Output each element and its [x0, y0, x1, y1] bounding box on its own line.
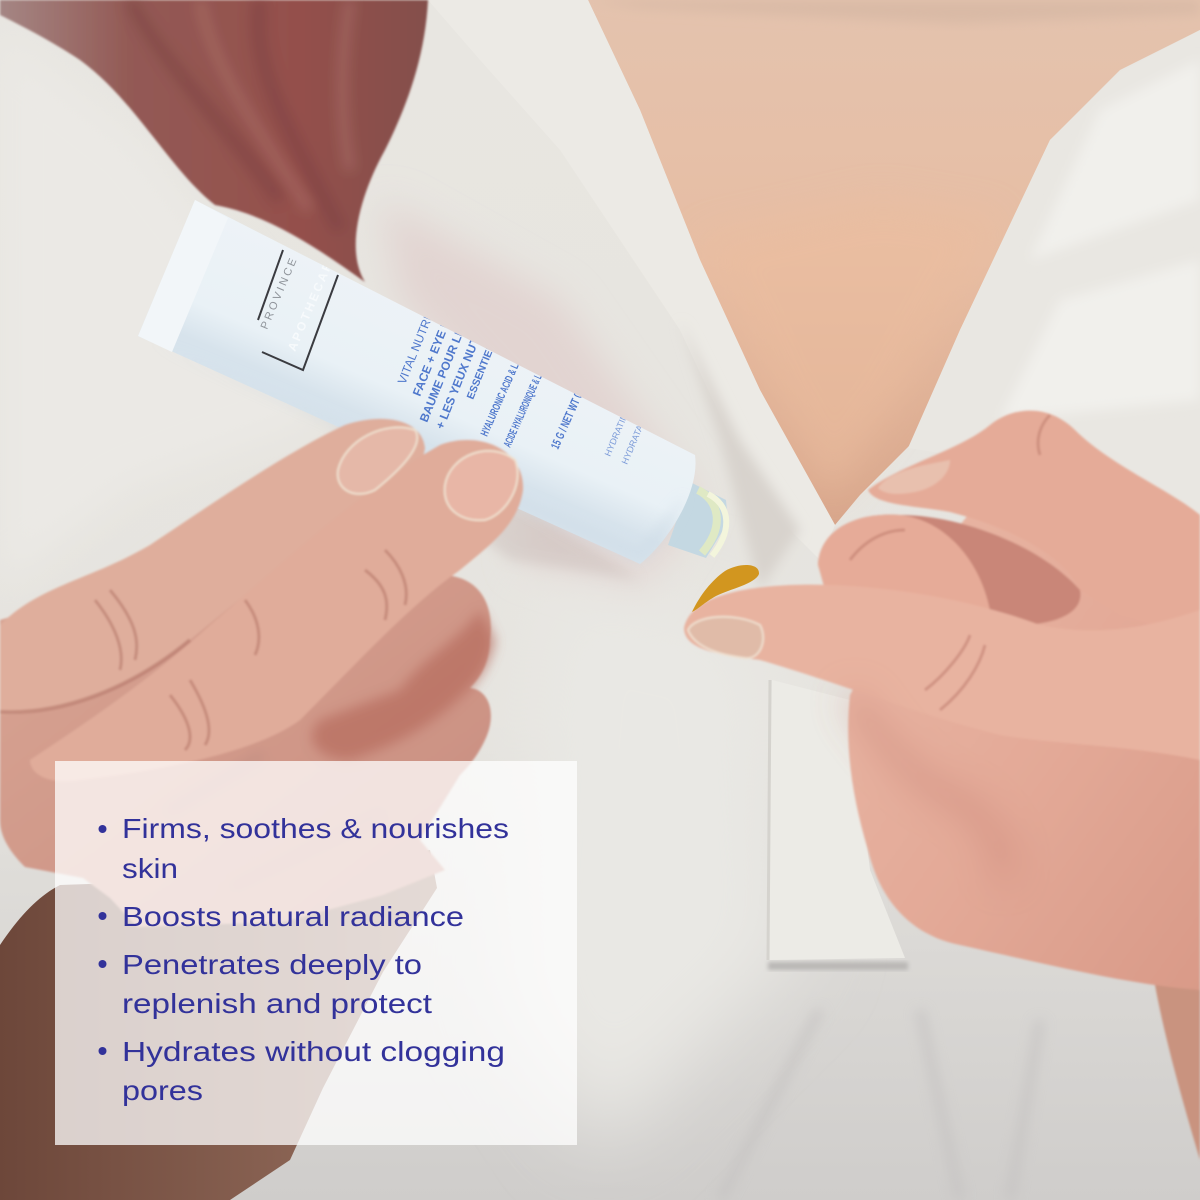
palm and back of hand — [848, 500, 1200, 990]
tube label text: ACIDE HYALURONIQUE & LANOLINE — [502, 348, 555, 449]
tube label text: FACE + EYE BALM — [410, 293, 463, 398]
knuckle creases — [850, 415, 1050, 710]
balm dollop — [692, 565, 759, 612]
fingernail — [688, 617, 763, 658]
shadow crease — [850, 695, 1004, 880]
thumbnail — [338, 427, 417, 494]
lower fingers and palm — [0, 560, 491, 927]
tube neck and thread — [668, 482, 728, 558]
logo box: PROVINCE — [259, 254, 300, 331]
pointing finger — [684, 585, 1200, 760]
wrist — [1155, 985, 1200, 1160]
thumb — [0, 419, 425, 715]
benefit: boosts natural radiance: Boosts natural radiance — [122, 901, 464, 932]
tube label text: HYALURONIC ACID & LANOLIN — [479, 337, 532, 438]
right hand — [684, 411, 1200, 1160]
knuckle creases — [0, 550, 406, 750]
left forearm — [0, 850, 437, 1200]
benefit: penetrates deeply: Penetrates deeply to — [122, 949, 422, 980]
benefit: hydrates without clogging — [98, 1036, 505, 1106]
chest skin — [588, 0, 1200, 525]
benefit: firms, soothes and nourishes: Firms, soothes & nourishes — [122, 813, 509, 844]
tube label text: HYDRATANT — [620, 412, 650, 466]
product tube — [138, 200, 728, 564]
tube body — [138, 200, 696, 564]
tube label text: VITAL NUTRIENT — [395, 291, 444, 386]
index finger — [30, 440, 523, 781]
benefit: penetrates deeply — [98, 949, 432, 1019]
tube label text: + LES YEUX NUTRIENTS — [433, 295, 499, 431]
hair — [0, 0, 428, 282]
fingernail — [445, 451, 518, 520]
benefit: hydrates without clogging: pores — [122, 1075, 203, 1106]
left collar and placket — [428, 0, 908, 970]
tube label text — [397, 316, 642, 464]
benefits panel — [55, 761, 577, 1145]
benefit: hydrates without clogging: Hydrates without clogging — [122, 1036, 505, 1067]
curled fingers — [818, 515, 1080, 625]
shadow under tube — [170, 350, 640, 580]
right collar — [908, 30, 1200, 520]
tube crimp — [138, 200, 228, 352]
logo box — [258, 249, 340, 370]
benefit: firms, soothes and nourishes — [98, 813, 509, 884]
tube label text: BAUME POUR LE VISAGE — [417, 280, 486, 424]
benefit: firms, soothes and nourishes: skin — [122, 853, 178, 884]
left hand — [0, 419, 523, 927]
tube label text: 15 G / NET WT 0.5 OZ — [548, 372, 593, 451]
tube label text: ESSENTIELS — [465, 336, 500, 401]
thumb — [868, 411, 1200, 640]
logo box: APOTHECARY — [285, 249, 340, 353]
benefit: penetrates deeply: replenish and protect — [122, 988, 432, 1019]
tube label text: HYDRATING — [603, 406, 632, 458]
